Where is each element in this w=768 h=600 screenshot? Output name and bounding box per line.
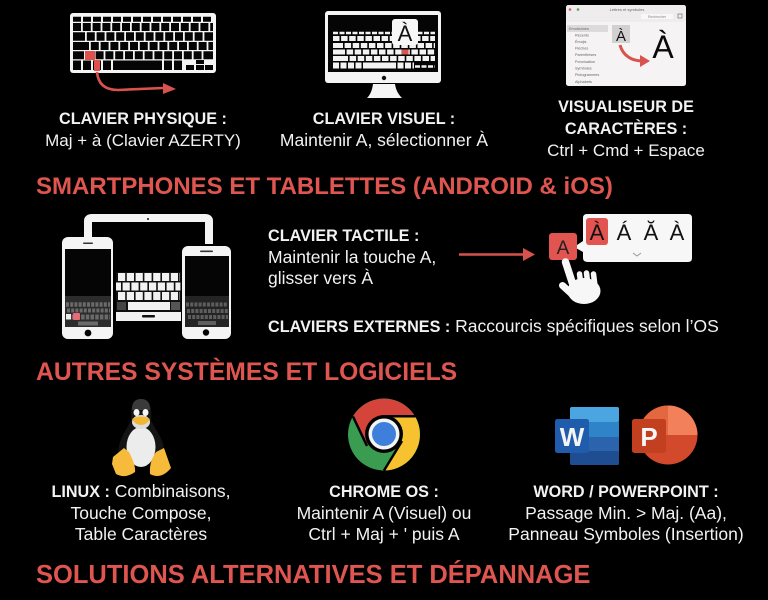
icon: A key	[549, 233, 577, 260]
arrow: keyboard key to output	[97, 72, 176, 94]
text: Linux: LINUX : Combinaisons,	[51, 481, 231, 501]
text: touch keyboard: Maintenir la touche A,	[268, 247, 436, 267]
text: Word and PowerPoint: WORD / POWERPOINT :	[533, 483, 719, 501]
icon: character viewer window: Alphabets	[575, 80, 592, 84]
text: physical keyboard: Maj + à (Clavier AZERTY)	[45, 131, 241, 150]
icon: Linux Tux penguin	[112, 399, 171, 476]
icon: monitor with visual keyboard: À	[398, 21, 413, 46]
icon: character viewer window: Parenthèses	[575, 53, 596, 57]
icon: Word logo	[555, 407, 619, 465]
text: Chrome OS: Maintenir A (Visuel) ou	[297, 503, 471, 523]
text: physical keyboard: CLAVIER PHYSIQUE :	[59, 110, 227, 128]
icon: Word logo: W	[560, 422, 585, 452]
text: touch keyboard	[268, 227, 436, 288]
icon: tablet behind devices	[88, 218, 209, 244]
icon: physical keyboard	[70, 13, 216, 73]
icon: left phone	[62, 237, 113, 339]
icon: character viewer window: Flèches	[575, 46, 588, 50]
text: character viewer: CARACTÈRES :	[565, 120, 687, 138]
heading: smartphones and tablets: SMARTPHONES ET TABLETTES (ANDROID & iOS)	[36, 173, 613, 200]
text: Linux: Table Caractères	[75, 524, 207, 544]
icon: PowerPoint logo	[632, 406, 698, 464]
icon: accent popup: À	[590, 220, 605, 245]
icon: Chrome logo	[348, 398, 420, 470]
icon: character viewer window: Emoticônes	[569, 27, 589, 31]
heading: alternative solutions: SOLUTIONS ALTERNATIVES ET DÉPANNAGE	[36, 561, 590, 589]
text: Chrome OS: Ctrl + Maj + ' puis A	[308, 524, 460, 544]
icon: character viewer window	[566, 5, 686, 86]
text: external keyboards: CLAVIERS EXTERNES : Raccourcis spécifiques selon l’OS	[268, 316, 719, 336]
icon: character viewer window: À	[616, 28, 626, 45]
text: Word and PowerPoint: Panneau Symboles (Insertion)	[508, 524, 744, 544]
icon: character viewer window: Pictogrammes	[575, 73, 599, 77]
arrow: touch keyboard	[459, 248, 535, 261]
text: Chrome OS: CHROME OS :	[329, 483, 439, 501]
icon: right phone	[182, 246, 231, 339]
icon: character viewer window: Récents	[575, 34, 589, 38]
text: touch keyboard: glisser vers À	[268, 268, 373, 288]
icon: accent popup: À	[670, 220, 685, 245]
text: touch keyboard: CLAVIER TACTILE :	[268, 227, 419, 245]
icon: external keyboard	[116, 272, 181, 321]
text: character viewer	[547, 98, 705, 160]
icon: character viewer window: Rechercher	[648, 15, 667, 19]
text: Linux	[51, 481, 231, 544]
text: Chrome OS	[297, 483, 471, 544]
text: physical keyboard	[45, 110, 241, 150]
text: visual keyboard: Maintenir A, sélectionner À	[280, 130, 488, 150]
text: character viewer: Ctrl + Cmd + Espace	[547, 141, 705, 160]
icon: A key: A	[557, 238, 570, 259]
text: Word and PowerPoint	[508, 483, 744, 544]
icon: character viewer window: Lettres et symboles	[610, 7, 644, 12]
icon: accent popup: Á	[617, 220, 632, 245]
text: character viewer: VISUALISEUR DE	[558, 98, 694, 116]
text: visual keyboard	[280, 110, 488, 150]
text: visual keyboard: CLAVIER VISUEL :	[313, 110, 455, 128]
heading: other systems and software: AUTRES SYSTÈMES ET LOGICIELS	[36, 359, 457, 386]
icon: monitor with visual keyboard	[325, 11, 441, 98]
icon: accent popup: Ă	[644, 220, 659, 245]
icon: PowerPoint logo: P	[640, 422, 658, 452]
icon: character viewer window: Ponctuation	[575, 60, 595, 64]
icon: character viewer window: Émojis	[575, 39, 586, 44]
text: Linux: Touche Compose,	[70, 503, 212, 523]
icon: pointing hand	[562, 262, 600, 304]
icon: accent popup	[574, 214, 692, 262]
icon: character viewer window: À	[652, 29, 674, 65]
icon: character viewer window: Symboles	[575, 66, 592, 70]
text: Word and PowerPoint: Passage Min. > Maj. (Aa),	[525, 503, 727, 523]
